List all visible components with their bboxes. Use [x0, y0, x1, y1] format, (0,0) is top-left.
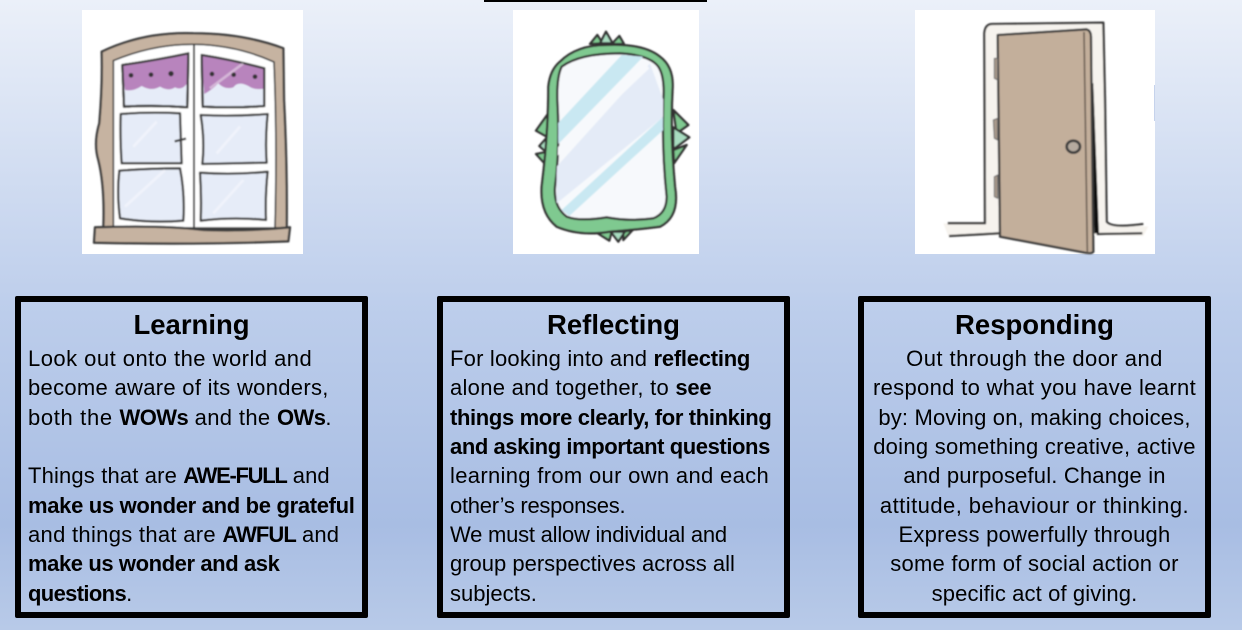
- text block: Learning description: become aware of its wonders,: [28, 375, 329, 400]
- panel: Learning: [15, 296, 368, 618]
- text block: Learning description: [28, 346, 355, 606]
- text block: Reflecting description: and asking important questions: [450, 434, 770, 459]
- text block: Learning description: make us wonder and be grateful: [28, 493, 355, 518]
- text block: Responding description: Express powerfully through: [898, 522, 1171, 547]
- panel: Reflecting: [437, 296, 790, 618]
- icon: door: [915, 10, 1155, 254]
- top rule: [484, 0, 707, 2]
- text block: Reflecting description: For looking into and reflecting: [450, 346, 750, 371]
- text block: Reflecting description: things more clearly, for thinking: [450, 405, 771, 430]
- text block: Responding description: and purposeful. Change in: [903, 463, 1166, 488]
- panel: Responding: [858, 296, 1211, 618]
- text block: Reflecting description: subjects.: [450, 581, 537, 606]
- icon: mirror: [513, 10, 699, 254]
- text block: Reflecting description: alone and together, to see: [450, 375, 711, 400]
- text block: Reflecting description: group perspectives across all: [450, 551, 735, 576]
- text block: Responding description: specific act of giving.: [932, 581, 1137, 606]
- text block: Responding description: Out through the door and: [906, 346, 1163, 371]
- text block: Learning description: Things that are AWE-FULL and: [28, 463, 330, 488]
- heading: Responding: Responding: [955, 309, 1114, 340]
- text block: Responding description: doing something creative, active: [873, 434, 1196, 459]
- heading: Reflecting: Reflecting: [547, 309, 680, 340]
- icon: window: [82, 10, 303, 254]
- text block: Responding description: attitude, behaviour or thinking.: [880, 493, 1189, 518]
- text block: Learning description: and things that are AWFUL and: [28, 522, 339, 547]
- heading: Learning: Learning: [133, 309, 250, 340]
- text block: Reflecting description: We must allow individual and: [450, 522, 727, 547]
- illustrations: [82, 10, 1155, 256]
- text block: Responding description: by: Moving on, making choices,: [878, 405, 1191, 430]
- text block: Responding description: some form of social action or: [890, 551, 1179, 576]
- text block: Reflecting description: learning from our own and each: [450, 463, 769, 488]
- text block: Reflecting description: other’s responses.: [450, 493, 625, 518]
- text block: Learning description: both the WOWs and the OWs.: [28, 405, 332, 430]
- text block: Reflecting description: [450, 346, 771, 606]
- text block: Learning description: questions.: [28, 581, 133, 606]
- text block: Responding description: [873, 346, 1196, 606]
- text block: Responding description: respond to what you have learnt: [873, 375, 1196, 400]
- text block: Learning description: make us wonder and ask: [28, 551, 279, 576]
- text block: Learning description: Look out onto the world and: [28, 346, 312, 371]
